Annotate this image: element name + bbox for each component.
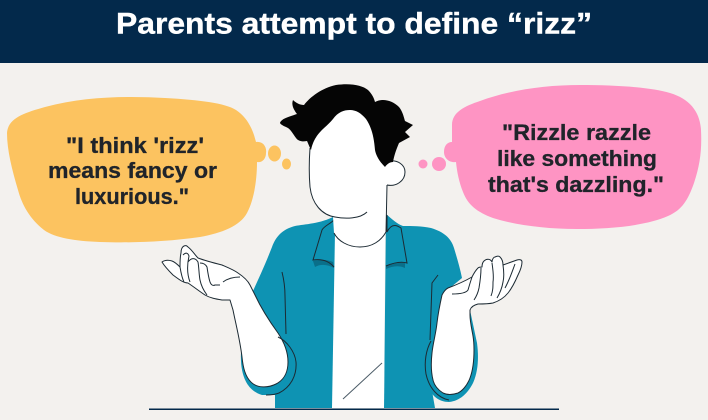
jacket: left side bbox=[253, 216, 336, 408]
quote text: pink bubble bbox=[488, 120, 664, 197]
sleeve cuff outline: right bbox=[425, 341, 449, 400]
sleeve cuff outline: left bbox=[266, 337, 296, 395]
left arm and hand bbox=[162, 246, 288, 387]
quote text: pink bubble: "Rizzle razzle bbox=[502, 120, 651, 145]
white t-shirt bbox=[332, 232, 385, 408]
quote text: orange bubble: means fancy or bbox=[48, 158, 217, 183]
title: Parents attempt to define “rizz” bbox=[116, 8, 592, 40]
right arm and hand bbox=[431, 256, 522, 394]
shirt fold line bbox=[343, 363, 382, 399]
thought dot: orange large bbox=[268, 146, 281, 162]
collar shadow: left bbox=[313, 260, 334, 268]
left hand finger lines bbox=[180, 253, 240, 295]
quote text: pink bubble: that's dazzling." bbox=[488, 172, 664, 197]
thought dot: pink small bbox=[418, 160, 428, 168]
sleeve cuff: right bbox=[426, 310, 478, 402]
collar shadow: right bbox=[386, 263, 405, 269]
sleeve cuff: left bbox=[241, 350, 292, 395]
quote text: orange bubble bbox=[48, 133, 217, 209]
quote text: orange bubble: luxurious." bbox=[75, 184, 189, 209]
head outline bbox=[309, 148, 405, 247]
thought bubble: pink bbox=[418, 85, 701, 229]
hair bbox=[280, 84, 413, 167]
quote text: pink bubble: like something bbox=[497, 146, 657, 171]
person figure bbox=[162, 84, 522, 408]
header banner bbox=[0, 0, 708, 63]
head and neck bbox=[309, 100, 405, 247]
jacket: right side bbox=[384, 214, 462, 408]
thought dot: orange small bbox=[282, 158, 291, 170]
jacket outline details bbox=[282, 215, 438, 340]
ground line bbox=[149, 408, 559, 410]
thought dot: pink large bbox=[432, 157, 446, 171]
right hand finger lines bbox=[452, 263, 515, 300]
quote text: orange bubble: "I think 'rizz' bbox=[66, 133, 204, 158]
thought bubble: orange bbox=[7, 97, 291, 242]
